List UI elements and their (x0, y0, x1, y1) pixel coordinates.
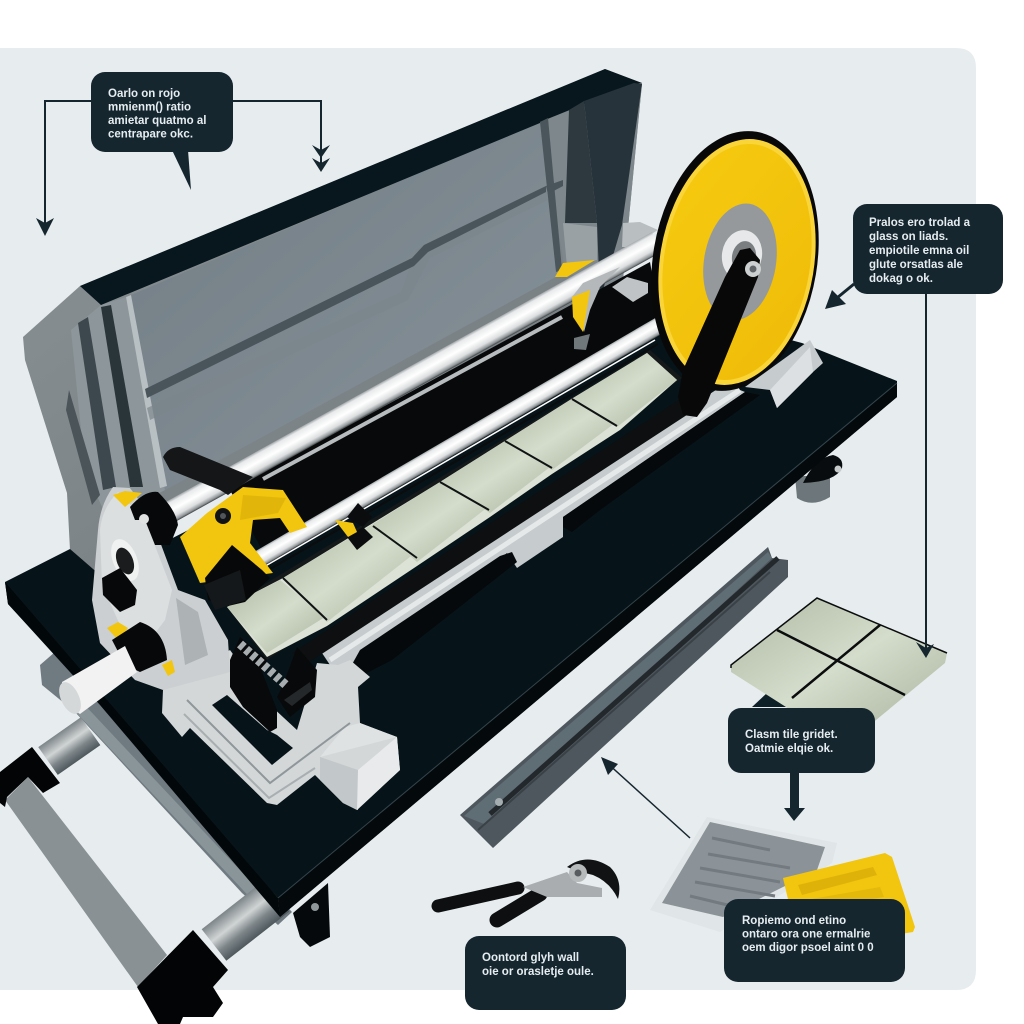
lid outer shell (23, 69, 642, 575)
tile bed (227, 350, 682, 660)
tile band (227, 353, 677, 657)
spring (240, 644, 287, 686)
callout: tile guide (728, 708, 875, 773)
callout text: Ropiemo ond etino (742, 915, 846, 927)
callout text: Oontord glyh wall (482, 952, 579, 964)
cutter bed black band (230, 262, 660, 565)
spare track (460, 547, 788, 848)
crank arm (678, 248, 760, 417)
blade yellow edge (641, 127, 833, 397)
disc face (100, 492, 172, 640)
upper thin rail (263, 317, 562, 479)
upper chrome rail (160, 232, 663, 525)
slot 2 (563, 392, 760, 532)
tile 4 (440, 441, 550, 513)
frame block shading (320, 723, 397, 757)
tile 3 (373, 482, 488, 562)
lid right interior (540, 84, 642, 290)
callout text: ontaro ora one ermalrie (742, 928, 870, 940)
clamp arm facet (240, 495, 286, 520)
lid right post dark (565, 101, 597, 223)
yellow clamp arm (180, 487, 307, 583)
blade yellow face (645, 133, 829, 391)
white tube (62, 646, 137, 714)
plier body (523, 872, 602, 897)
tile row (227, 350, 682, 660)
hub ring (718, 227, 766, 283)
table stand and handle (0, 455, 842, 1024)
callout text: Pralos ero trolad a (869, 217, 970, 229)
arrow: to loose tiles (916, 294, 934, 658)
clamp handle black (163, 447, 253, 495)
lid inner frame (71, 297, 165, 520)
callout text: empiotile emna oil (869, 245, 969, 257)
callout text: glute orsatlas ale (869, 259, 963, 271)
silver base frame (162, 637, 400, 810)
handle corner bottom (137, 930, 228, 1024)
lid recess shade (147, 186, 548, 420)
callout: sheet (724, 899, 905, 982)
plier jaw (567, 860, 619, 899)
callout text: oie or orasletje oule. (482, 966, 594, 978)
callout text: centrapare okc. (108, 128, 193, 140)
knob top (130, 492, 178, 545)
handle bar (5, 777, 167, 987)
paper sheet (650, 817, 837, 932)
right bracket (745, 340, 823, 408)
lid recess line (145, 186, 546, 398)
black rail under tiles (297, 406, 685, 660)
callout text: Clasm tile gridet. (745, 729, 838, 741)
tile outline (731, 598, 947, 668)
callout: top left (91, 72, 233, 190)
lid top band (80, 69, 642, 305)
lid left posts (78, 317, 116, 490)
arrow: to sheet (784, 772, 805, 821)
callout text: Oatmie elqie ok. (745, 743, 833, 755)
blade hub grey (695, 198, 785, 326)
handle one (438, 888, 518, 906)
small clamp (335, 503, 373, 550)
left foot (293, 883, 330, 947)
arrow: top right branch (233, 101, 330, 172)
callout text: mmienm() ratio (108, 102, 191, 114)
tile cross lines (777, 625, 905, 698)
yellow tabs (107, 622, 128, 640)
lid shadow strip (66, 390, 100, 505)
disc slot (106, 535, 144, 585)
handle two (497, 894, 540, 920)
scoring mechanism right (277, 647, 317, 717)
tile 1 (227, 580, 325, 653)
lid silver block (563, 223, 597, 267)
frame body (162, 650, 400, 810)
tile separators (283, 399, 617, 620)
callout text: amietar quatmo al (108, 115, 206, 127)
frame grooves (187, 700, 350, 783)
tile 5 (505, 399, 615, 470)
frame window (212, 695, 293, 765)
slot 1 (350, 552, 517, 674)
lower chrome rail (236, 318, 664, 577)
blade wheel (633, 118, 837, 417)
arrow: to track (601, 757, 690, 838)
callout: blade (853, 204, 1003, 294)
callout text: dokag o ok. (869, 273, 933, 285)
table front edge (278, 383, 897, 917)
lower knob (112, 622, 167, 672)
scoring mechanism left (230, 637, 277, 732)
right foot (795, 476, 830, 503)
stand cross tube lower (202, 880, 289, 961)
lid right dark panel (584, 83, 642, 300)
silver strip (320, 384, 760, 674)
arrow: blade pointer (825, 284, 854, 309)
callout: plier (465, 936, 626, 1010)
tile 6 (572, 353, 677, 427)
top right clamp (555, 260, 620, 350)
arrow: top left branch (36, 101, 91, 236)
lid glass (126, 122, 563, 490)
tile 2 (283, 524, 415, 622)
plier tool (438, 860, 619, 920)
lid right post narrow (540, 118, 562, 272)
stand rail (40, 652, 292, 925)
loose tiles (731, 598, 947, 735)
yellow block (783, 853, 915, 950)
sector panel (176, 598, 208, 665)
handle corner top (0, 747, 60, 807)
callout text: oem digor psoel aint 0 0 (742, 942, 874, 954)
back bracket (612, 222, 658, 302)
head casting (55, 447, 307, 717)
callout text: glass on liads. (869, 231, 948, 243)
upper knob (102, 568, 137, 612)
yellow collar (113, 491, 142, 507)
black roller (205, 545, 270, 606)
silver disc (92, 487, 230, 690)
stand cross tube upper (38, 717, 100, 775)
lid (23, 69, 642, 575)
shadow shape (752, 693, 793, 707)
clamp bolt (215, 508, 231, 524)
pivot (569, 864, 587, 882)
crank pivot (745, 261, 761, 277)
blade rim (633, 118, 837, 404)
callout text: Oarlo on rojo (108, 88, 180, 100)
table top (5, 300, 897, 917)
table left edge (5, 582, 280, 917)
lid crossbar (546, 180, 563, 194)
